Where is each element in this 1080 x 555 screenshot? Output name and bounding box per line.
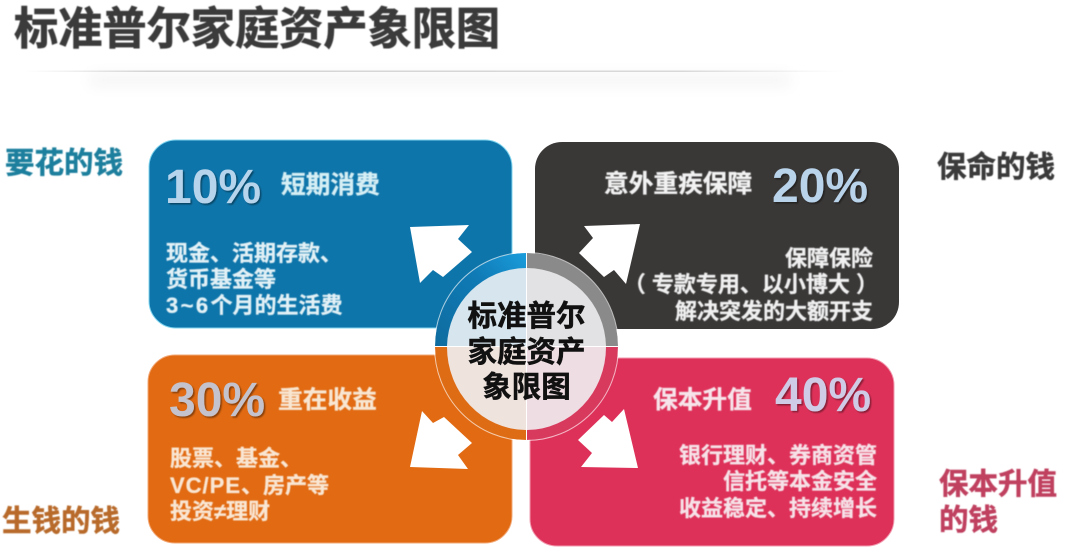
description [679, 443, 877, 521]
label: preserve capital money [939, 468, 1057, 537]
description: 3~6个月的生活费 [166, 293, 343, 318]
label: money to protect life: 保命的钱 [937, 150, 1055, 184]
arrow: down-right [578, 409, 638, 468]
label: money to spend: 要花的钱 [5, 147, 123, 180]
description: 股票、基金、 [170, 446, 302, 471]
description [624, 246, 878, 324]
arrow: up-left [410, 225, 472, 283]
heading: return focused: 重在收益 [278, 386, 377, 414]
description: 信托等本金安全 [723, 469, 877, 494]
heading: capital preservation: 保本升值 [653, 386, 752, 414]
percentage 30%: 30% [169, 374, 265, 427]
ring quadrants [434, 252, 618, 440]
description: 现金、活期存款、 [166, 241, 342, 266]
percentage 10%: 10% [165, 161, 261, 214]
label: money that makes money: 生钱的钱 [2, 505, 120, 538]
label: preserve capital money: 保本升值 [939, 468, 1057, 501]
inner disc [447, 268, 606, 430]
description: 货币基金等 [166, 267, 276, 292]
description: 收益稳定、持续增长 [679, 496, 877, 521]
panel: accident and illness cover 20% [535, 142, 899, 329]
description: 投资≠理财 [170, 499, 270, 524]
arrow: down-left [410, 411, 472, 469]
label: preserve capital money: 的钱 [939, 504, 998, 537]
description: 解决突发的大额开支 [675, 299, 873, 324]
center text: 象限图 [482, 371, 571, 404]
center circle [434, 252, 618, 440]
percentage 40%: 40% [775, 369, 871, 422]
description [170, 446, 329, 524]
description [166, 241, 343, 318]
center text: 标准普尔 [467, 300, 586, 333]
heading: accident and illness cover: 意外重疾保障 [604, 169, 752, 198]
description: （ 专款专用、以小博大 ） [624, 272, 878, 297]
percentage 20%: 20% [772, 160, 868, 213]
description: VC/PE、房产等 [170, 473, 329, 498]
title: 标准普尔家庭资产象限图 [14, 5, 500, 54]
center text: 家庭资产 [467, 336, 586, 369]
arrow: up-right [579, 224, 640, 284]
panel: capital preservation 40% [530, 358, 894, 546]
panel: return focused 30% [148, 355, 512, 543]
description: 银行理财、券商资管 [679, 443, 877, 468]
center text [467, 300, 586, 404]
heading: short-term spending: 短期消费 [281, 171, 380, 199]
description: 保障保险 [785, 246, 873, 271]
panel: short-term spending 10% [149, 140, 512, 328]
